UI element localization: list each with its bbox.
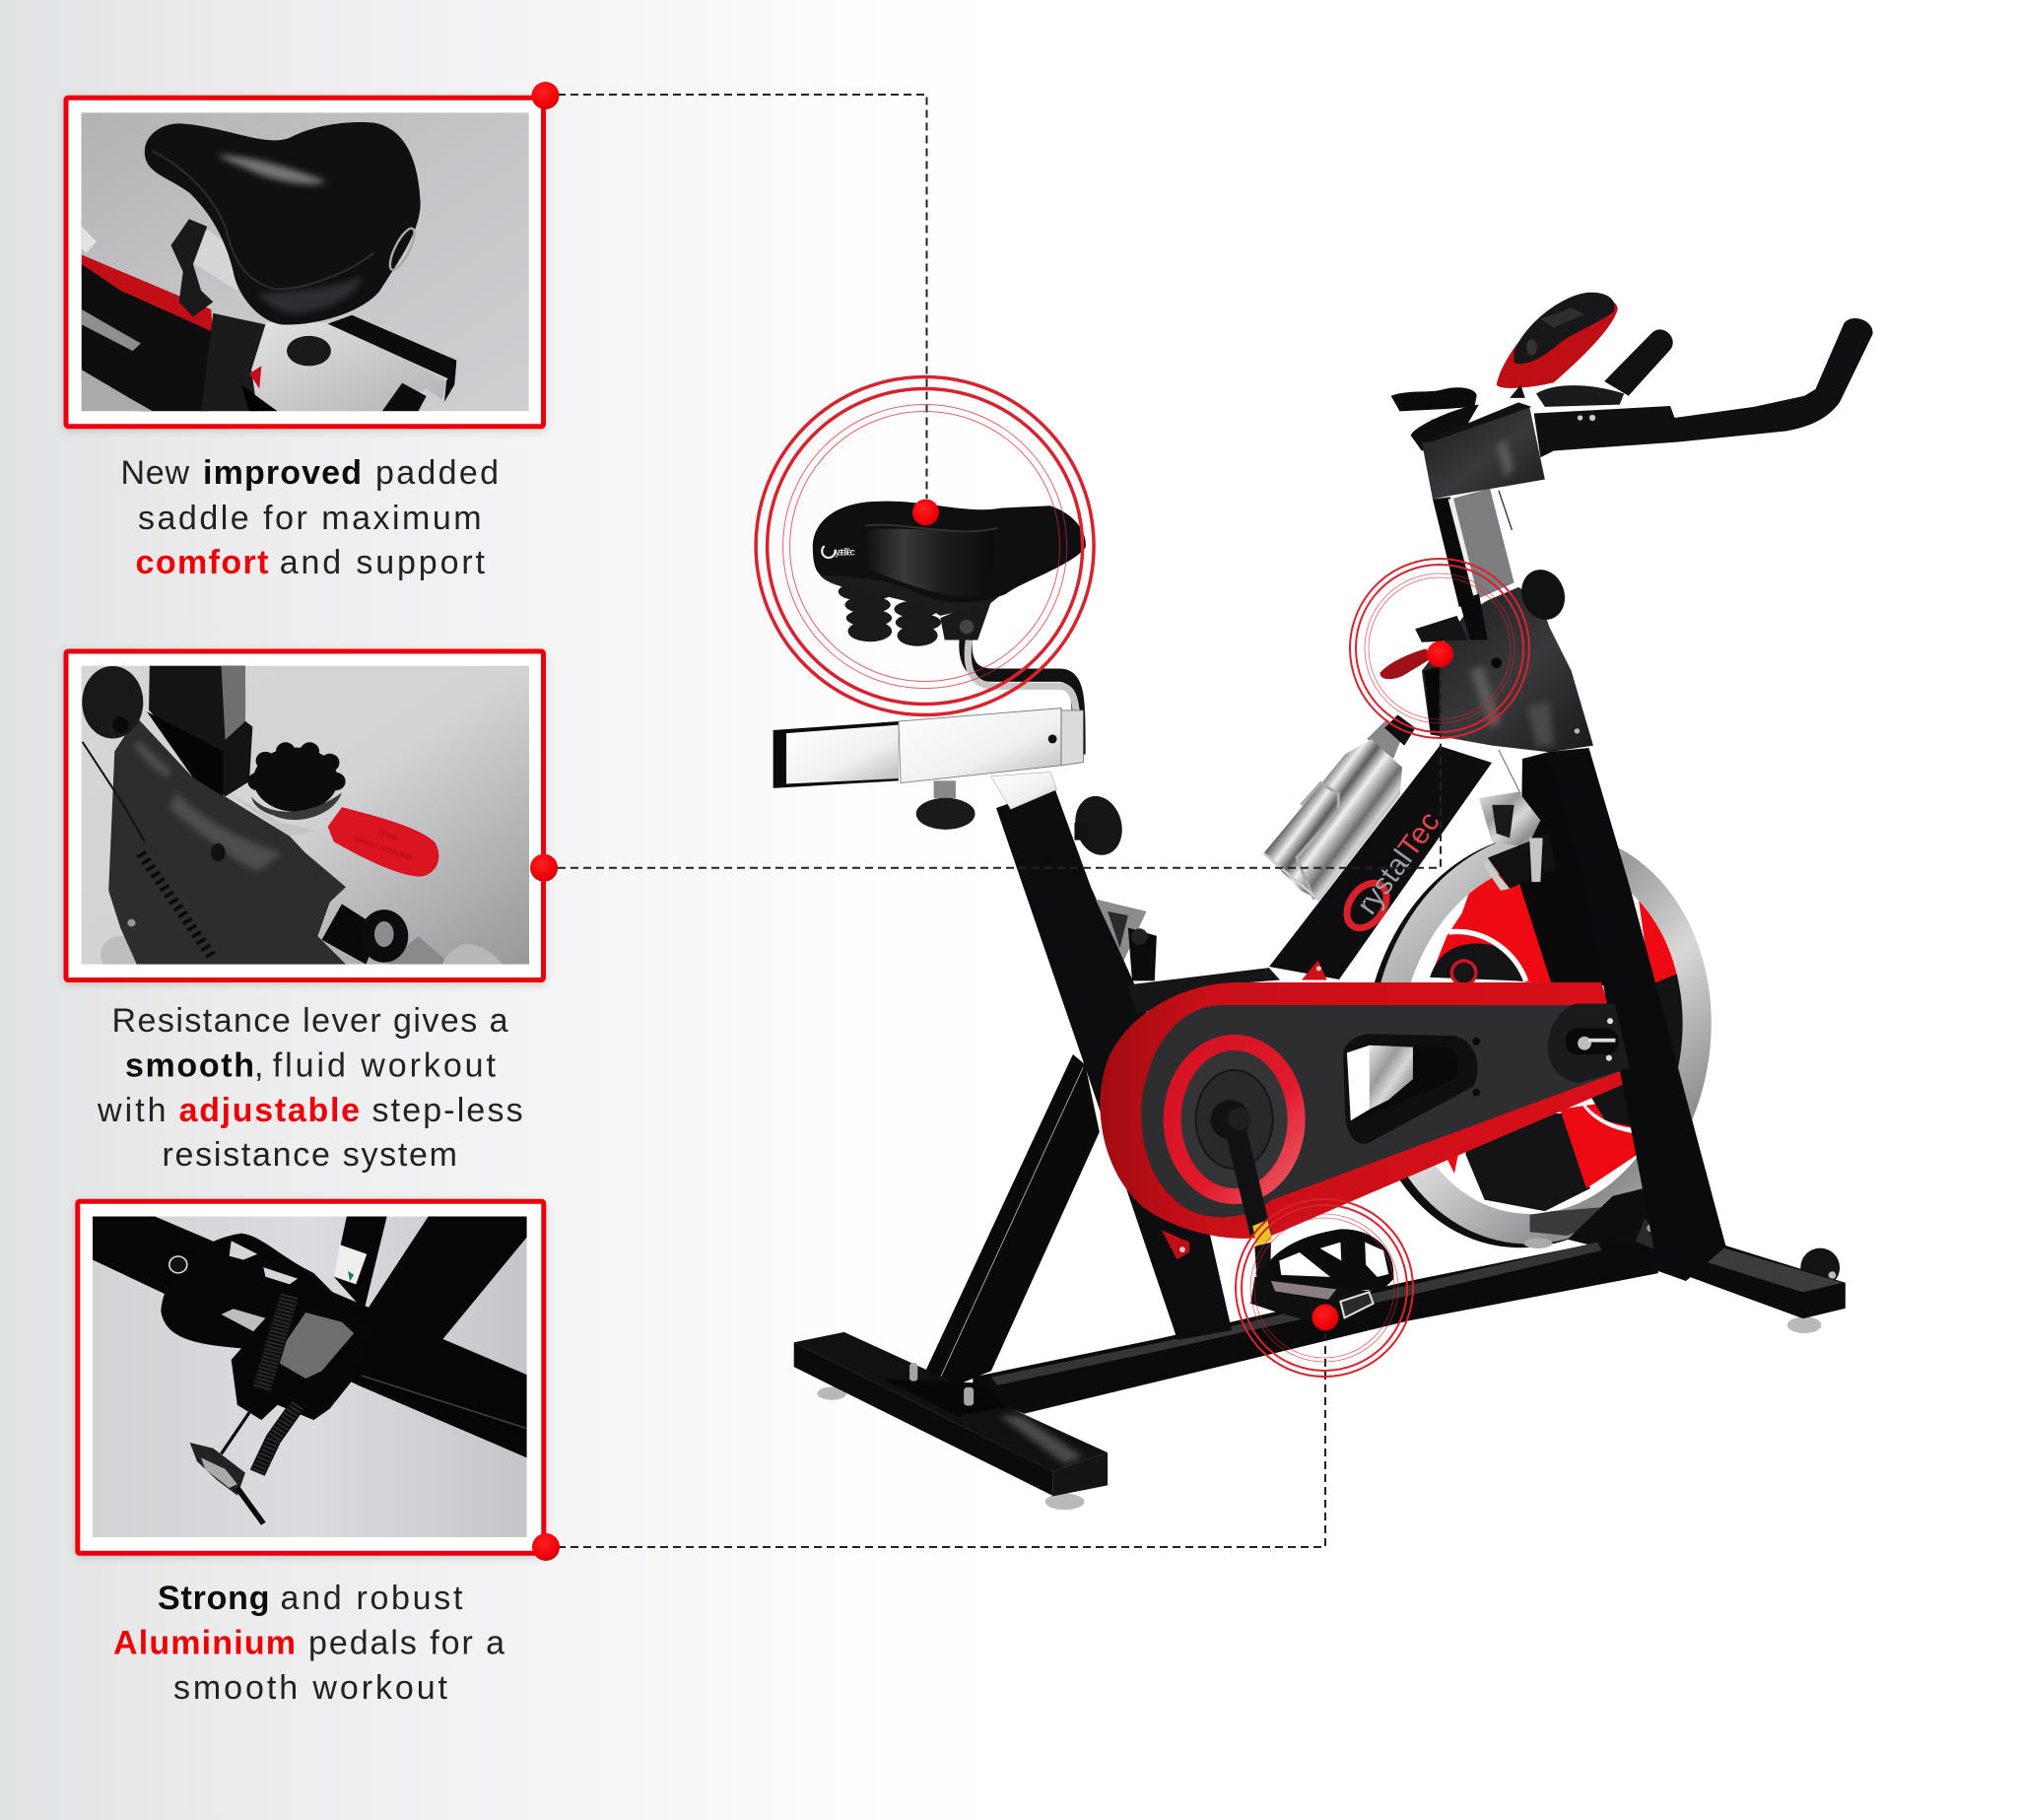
handlebar bbox=[1391, 318, 1873, 500]
pedal caption bbox=[113, 1580, 504, 1707]
frame logo bbox=[1339, 806, 1446, 935]
saddle caption: and support bbox=[280, 544, 486, 581]
saddle base bbox=[820, 574, 1011, 616]
resistance housing and head tube bbox=[1379, 488, 1593, 794]
photo: pedal close-up bbox=[93, 1216, 527, 1537]
guard rings bbox=[1164, 1035, 1306, 1204]
connector: pedal dashed line bbox=[558, 1317, 1325, 1547]
seat rail bbox=[774, 632, 1128, 860]
saddle caption: improved bbox=[203, 454, 362, 492]
seat post insert bbox=[991, 772, 1057, 809]
target rings: saddle bbox=[756, 376, 1094, 715]
resistance caption: fluid workout bbox=[273, 1046, 497, 1084]
pedal caption: smooth workout bbox=[173, 1669, 448, 1707]
seat tube bbox=[996, 787, 1232, 1340]
rear stabilizer bbox=[1636, 1219, 1846, 1333]
saddle springs bbox=[839, 582, 993, 646]
resistance caption: smooth bbox=[125, 1046, 254, 1084]
connector: saddle dashed line bbox=[558, 95, 926, 499]
saddle caption bbox=[120, 454, 499, 581]
resistance caption: Resistance lever gives a bbox=[112, 1002, 508, 1040]
bottle bbox=[1263, 714, 1415, 900]
brake assembly bbox=[1479, 791, 1556, 891]
saddle caption: comfort bbox=[136, 544, 268, 581]
pedal caption: Aluminium bbox=[113, 1624, 296, 1661]
front brace and stabilizer bbox=[794, 1054, 1108, 1510]
target rings: pedal bbox=[1236, 1199, 1413, 1377]
top tube bbox=[1269, 746, 1492, 979]
red chain guard bbox=[1100, 982, 1636, 1239]
resistance caption: adjustable bbox=[179, 1092, 360, 1129]
panel: saddle photo frame bbox=[66, 98, 544, 427]
target rings: resistance bbox=[1350, 559, 1529, 738]
guard cut-out bbox=[1343, 1034, 1480, 1144]
frame logo: Tec bbox=[1392, 806, 1446, 863]
pedal caption: pedals for a bbox=[308, 1624, 504, 1661]
photo: saddle close-up bbox=[81, 112, 529, 411]
seat assembly: rystalTec bbox=[834, 548, 855, 559]
guard tabs bbox=[1162, 961, 1327, 1259]
saddle caption: padded bbox=[375, 454, 499, 492]
saddle caption: New bbox=[120, 454, 189, 492]
connector: resistance dashed line bbox=[558, 654, 1441, 868]
main base bar bbox=[973, 1243, 1658, 1414]
resistance caption: step-less bbox=[372, 1092, 523, 1129]
resistance caption bbox=[97, 1002, 523, 1174]
guard dark face bbox=[1141, 1005, 1626, 1217]
pedal bbox=[1211, 1100, 1393, 1320]
panel: pedal photo frame bbox=[78, 1201, 544, 1553]
pedal caption: and robust bbox=[280, 1580, 463, 1617]
flywheel bbox=[1374, 843, 1712, 1248]
resistance caption: resistance system bbox=[162, 1136, 457, 1174]
photo: resistance lever close-up: PRESS bbox=[377, 828, 399, 841]
saddle caption: saddle for maximum bbox=[138, 500, 482, 537]
frame logo: rystal bbox=[1351, 843, 1419, 920]
photo: resistance lever close-up: EMERGENCY BRAKE bbox=[353, 835, 413, 861]
pedal caption: Strong bbox=[158, 1580, 270, 1617]
marker dots bbox=[530, 82, 1453, 1561]
saddle body bbox=[813, 502, 1086, 603]
resistance caption: , bbox=[254, 1046, 263, 1084]
panel: resistance lever photo frame bbox=[66, 651, 544, 979]
seat assembly bbox=[774, 502, 1128, 860]
exercise bike bbox=[774, 293, 1873, 1510]
rear dark strut bbox=[1520, 752, 1616, 985]
photo: resistance lever close-up bbox=[81, 666, 529, 974]
console bbox=[1497, 293, 1618, 398]
rear sprocket cover bbox=[1548, 1004, 1630, 1083]
main rear upright bbox=[1549, 748, 1726, 1281]
resistance caption: with bbox=[97, 1092, 167, 1129]
seat brake mechanism bbox=[1096, 899, 1280, 1014]
